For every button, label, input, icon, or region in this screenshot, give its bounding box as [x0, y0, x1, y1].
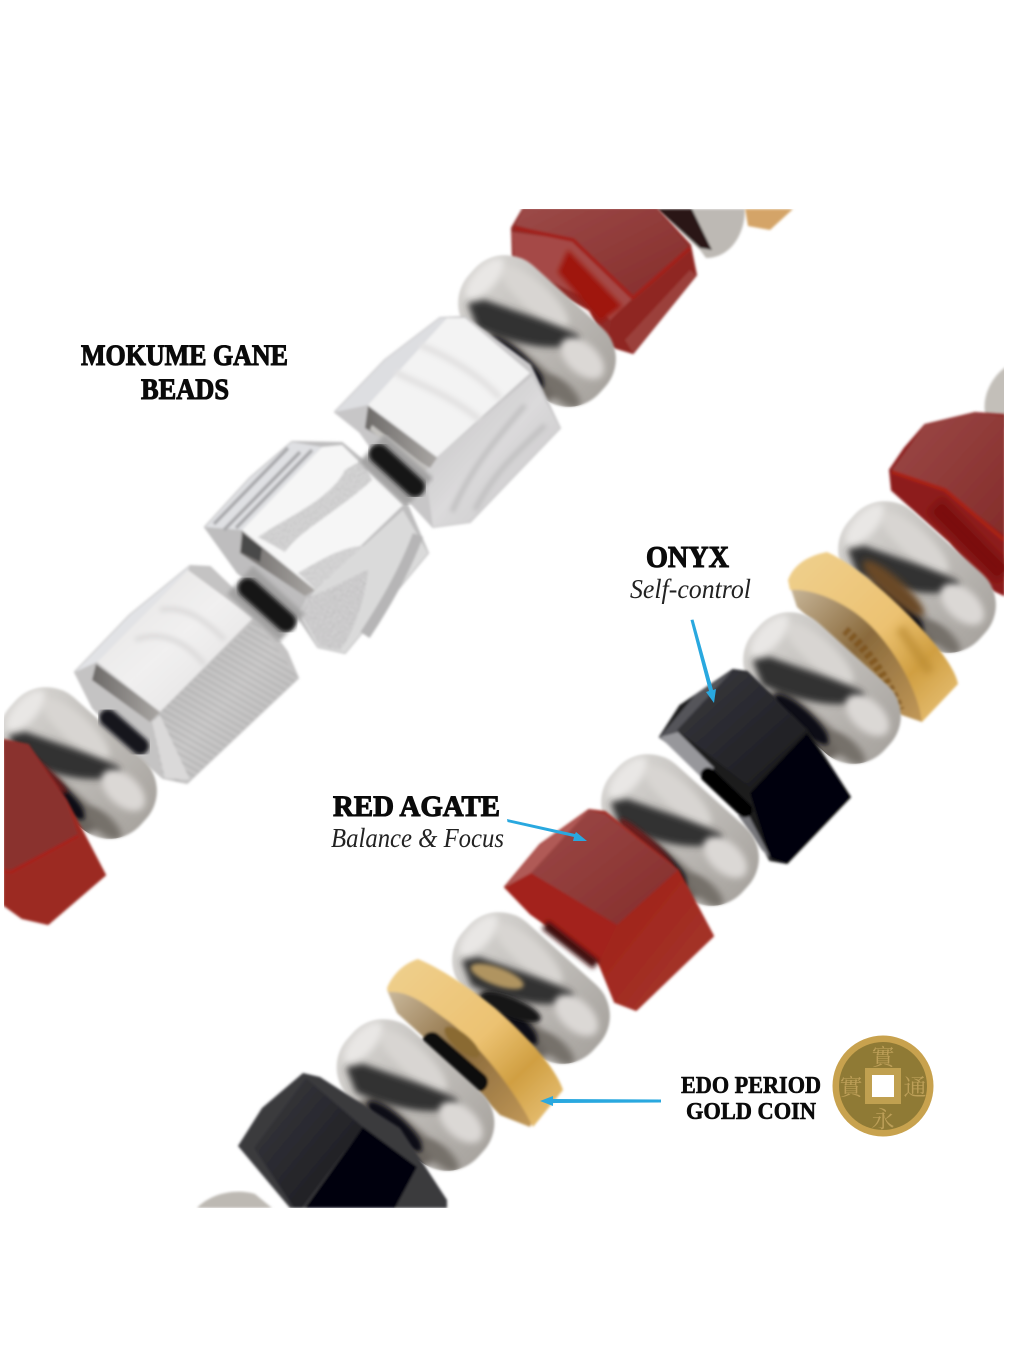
label: red agate: [331, 790, 504, 853]
onyx bead: [660, 670, 850, 863]
arrow: gold coin: [540, 1096, 661, 1106]
label: mokume gane beads: BEADS: [141, 373, 229, 406]
icon: edo period gold coin: 通: [904, 1075, 926, 1100]
silver spacer ring 4: [451, 911, 612, 1066]
silver spacer top right: [983, 366, 1004, 428]
icon: edo period gold coin: 實: [872, 1045, 896, 1070]
label: mokume gane beads: MOKUME GANE: [81, 339, 288, 372]
small silver spacer top: [657, 209, 745, 258]
gold coin bead lower: [387, 959, 563, 1127]
dark connector between mokume beads 2 and 3: [240, 580, 292, 628]
arrow: onyx: [690, 620, 716, 703]
red agate bead left: [4, 740, 105, 924]
arrow: red agate: [507, 819, 587, 841]
gold coin top: [745, 209, 793, 230]
label: red agate: RED AGATE: [333, 790, 500, 823]
silver spacer ring upper: [457, 254, 618, 408]
label: edo period gold coin: EDO PERIOD: [681, 1073, 821, 1099]
silver spacer ring 3: [600, 753, 760, 908]
onyx bead lower: [238, 1073, 447, 1208]
gold coin bead upper: [788, 552, 958, 722]
icon: edo period gold coin: [832, 1036, 934, 1136]
red agate bead centre: [505, 810, 713, 1010]
mokume bead 3: [75, 566, 298, 783]
label: mokume gane beads: [81, 339, 288, 406]
silver spacer ring 5: [336, 1018, 496, 1172]
icon: edo period gold coin: 永: [872, 1107, 894, 1132]
dark connector between mokume beads 1 and 2: [372, 448, 420, 492]
silver spacer ring 1: [837, 500, 998, 654]
label: edo period gold coin: [681, 1073, 821, 1125]
icon: edo period gold coin: 實: [840, 1075, 864, 1100]
label: red agate: Balance & Focus: [331, 823, 504, 853]
mokume bead 1: [335, 317, 560, 527]
label: onyx: ONYX: [646, 539, 730, 574]
dark connector beside mokume bead 3: [108, 718, 140, 746]
label: onyx: [630, 539, 751, 604]
silver spacer ring lower left: [4, 686, 158, 840]
red agate bead top: [512, 209, 696, 353]
lower bracelet strand: [197, 352, 1012, 1208]
silver spacer bottom: [197, 1192, 272, 1208]
red agate bead right: [890, 413, 1004, 595]
label: onyx: Self-control: [630, 574, 751, 604]
upper bracelet strand: [0, 209, 793, 924]
silver spacer ring 2: [742, 611, 902, 766]
photo: bead bracelets: [0, 209, 1012, 1208]
label: edo period gold coin: GOLD COIN: [686, 1099, 817, 1125]
mokume bead 2: [205, 442, 428, 653]
